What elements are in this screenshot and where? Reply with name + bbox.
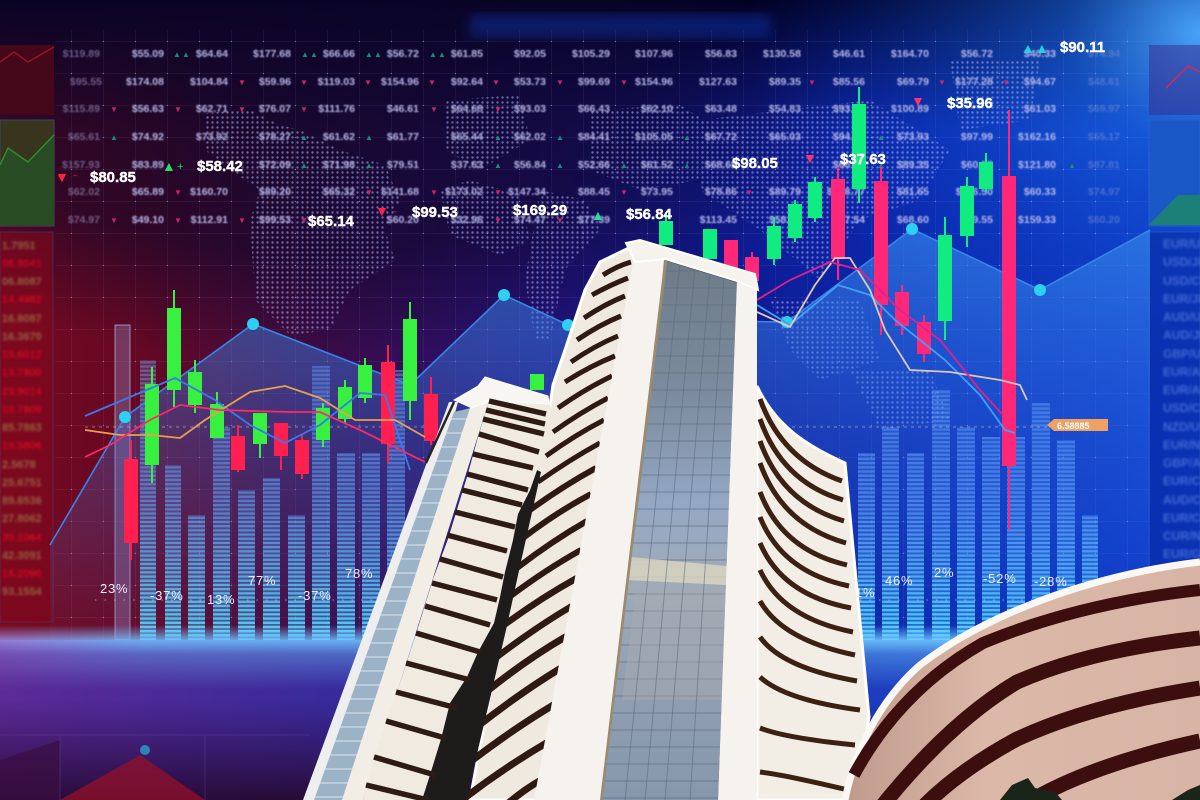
highlighted price arrows: ▲	[162, 158, 176, 174]
price ticker table: $111.76	[318, 103, 355, 115]
price ticker table: $154.96	[381, 76, 419, 88]
price ticker table: $61.62	[323, 131, 355, 143]
price ticker table: $174.08	[126, 76, 164, 88]
price ticker table: $116.50	[956, 186, 993, 198]
price ticker table: $65.61	[68, 131, 100, 143]
percentage labels: 2%	[934, 565, 954, 580]
price ticker table: $60.20	[1088, 214, 1120, 226]
price ticker table: $105.05	[635, 131, 673, 143]
panel: rate list: 23.9014	[2, 386, 43, 398]
price ticker table: $66.81	[833, 159, 865, 171]
panel: red mini chart	[0, 45, 54, 115]
panel: rate list: 89.6536	[2, 495, 42, 507]
highlighted prices	[90, 39, 1105, 230]
highlighted price arrows: ▼	[803, 150, 817, 166]
moving average lines	[85, 258, 1027, 470]
panel: rate list: 27.8062	[2, 513, 42, 525]
building: curved dome building	[845, 560, 1200, 800]
highlighted price arrows	[55, 40, 1049, 223]
price ticker table: $66.66	[323, 48, 355, 60]
dome balcony bands	[854, 590, 1200, 800]
price ticker table: $58.85	[769, 214, 801, 226]
panel: rate list: 06.8087	[2, 276, 42, 288]
panel: rate list: 13.7800	[2, 367, 42, 379]
highlighted prices: $90.11	[1060, 39, 1105, 56]
highlighted price arrows: –	[392, 207, 397, 216]
price ticker table: $65.44	[451, 131, 483, 143]
price ticker table: $89.20	[259, 186, 291, 198]
price ticker table: $74.97	[68, 214, 100, 226]
highlighted prices: $35.96	[947, 95, 993, 112]
price ticker table: $173.02	[445, 186, 483, 198]
price tag label: 6.58885	[1057, 421, 1090, 431]
percentage labels: -52%	[983, 571, 1017, 586]
price ticker table: $52.66	[578, 159, 610, 171]
ticker arrows: ▲▲▲▲▲▲▲	[110, 133, 885, 142]
price ticker table	[62, 48, 1120, 226]
highlighted prices: $169.29	[513, 202, 567, 219]
price ticker table: $89.79	[769, 186, 801, 198]
price ticker table: $46.61	[387, 103, 419, 115]
price ticker table: $77.39	[578, 214, 610, 226]
price ticker table: $105.29	[572, 48, 610, 60]
price ticker table: $87.81	[1088, 159, 1120, 171]
dotted world map	[205, 60, 1040, 430]
price ticker table: $64.64	[196, 48, 228, 60]
panel: rate list: 14.4982	[2, 294, 42, 306]
price ticker table: $62.02	[514, 131, 546, 143]
price ticker table: $162.16	[1018, 131, 1056, 143]
bottom chart fragments	[0, 735, 310, 800]
price ticker table: $93.03	[514, 103, 546, 115]
highlighted prices: $37.63	[840, 151, 886, 168]
price ticker table: $48.61	[1088, 76, 1120, 88]
panel: rate list: 16.8087	[2, 313, 42, 325]
price ticker table: $157.93	[62, 159, 100, 171]
price ticker table: $127.63	[699, 76, 737, 88]
highlighted prices: $99.53	[412, 204, 458, 221]
highlighted prices: $65.14	[308, 213, 355, 230]
price ticker table: $62.10	[641, 103, 673, 115]
panel: rate list: 19.5806	[2, 440, 42, 452]
lower glowing floor	[0, 626, 970, 800]
percentage labels: 77%	[248, 573, 276, 588]
price ticker table: $59.96	[259, 76, 291, 88]
panel: rate list: 93.1554	[2, 586, 43, 598]
price ticker table: $147.34	[508, 186, 546, 198]
ticker arrows: ▼▼▼▼▼▼	[110, 105, 502, 114]
left side panels	[0, 45, 54, 622]
price ticker table: $37.63	[451, 159, 483, 171]
panel: rate list: 2.5678	[2, 459, 36, 471]
price ticker table: $65.03	[769, 131, 801, 143]
chart markers	[119, 223, 1046, 423]
price ticker table: $177.28	[955, 76, 993, 88]
price ticker table: $115.89	[63, 103, 100, 115]
price ticker table: $61.85	[451, 48, 483, 60]
price ticker table: $104.84	[190, 76, 228, 88]
price ticker table: $83.89	[132, 159, 164, 171]
price ticker table: $81.65	[897, 186, 929, 198]
price ticker table: $56.72	[387, 48, 419, 60]
price ticker table: $56.84	[514, 159, 546, 171]
panel: rate list: 10.7809	[2, 404, 42, 416]
ticker arrows: ▲▲▲▲▲▲▲▲	[300, 161, 1076, 170]
price ticker table: $68.66	[705, 159, 737, 171]
price ticker table: $65.89	[132, 186, 164, 198]
highlighted price arrows: ▲	[591, 207, 605, 223]
price ticker table: $74.97	[1088, 186, 1120, 198]
price ticker table: $130.58	[763, 48, 801, 60]
price ticker table: $56.63	[132, 103, 164, 115]
highlighted price arrows: ▲	[1035, 40, 1049, 56]
panel: rate list	[0, 232, 53, 622]
price ticker table: $92.05	[514, 48, 546, 60]
price ticker table: $66.43	[578, 103, 610, 115]
price ticker table: $78.86	[705, 186, 737, 198]
panel: rate list: 16.3670	[2, 331, 42, 343]
price ticker table: $53.73	[514, 76, 546, 88]
panel: rate list: 08.8041	[2, 258, 42, 270]
price ticker table: $68.60	[897, 214, 929, 226]
price ticker table: $74.47	[514, 214, 546, 226]
percentage labels: 1%	[855, 585, 875, 600]
price ticker table: $60.55	[961, 159, 993, 171]
ticker arrows: ▼▼▼▼▼▼▼▼▼▼	[238, 78, 1010, 87]
price ticker table: $119.03	[318, 76, 355, 88]
price ticker table: $67.72	[705, 131, 737, 143]
price ticker table: $76.07	[259, 103, 291, 115]
right side panels	[1149, 45, 1200, 592]
price ticker table: $99.53	[259, 214, 291, 226]
percentage labels: 78%	[345, 566, 373, 581]
ticker arrows	[110, 50, 1076, 225]
price ticker table: $69.79	[897, 76, 929, 88]
highlighted prices: $56.84	[626, 206, 673, 223]
price ticker table: $108.77	[827, 186, 865, 198]
panel: currency pair list	[1149, 232, 1200, 592]
price ticker table: $46.61	[833, 48, 865, 60]
price ticker table: $94.67	[1024, 76, 1056, 88]
percentage labels	[100, 565, 1068, 607]
panel: red mini chart right	[1149, 45, 1200, 115]
highlighted prices: $98.05	[732, 155, 778, 172]
price ticker table: $49.10	[132, 214, 164, 226]
price ticker table: $32.96	[451, 214, 483, 226]
price ticker table: $87.54	[833, 214, 865, 226]
price ticker table: $113.45	[700, 214, 737, 226]
highlighted price arrows: ▼	[55, 169, 69, 185]
price ticker table: $54.83	[769, 103, 801, 115]
highlighted price arrows: ▲	[1021, 40, 1035, 56]
highlighted prices: $80.85	[90, 169, 136, 186]
highlighted outlined bar	[115, 325, 130, 640]
price ticker table: $107.96	[635, 48, 673, 60]
price ticker table: $119.89	[63, 48, 100, 60]
price ticker table: $60.20	[387, 214, 419, 226]
palm fronds	[1000, 778, 1200, 800]
price ticker table: $99.69	[578, 76, 610, 88]
price ticker table: $56.72	[961, 48, 993, 60]
price ticker table: $74.92	[132, 131, 164, 143]
highlighted price arrows: –	[73, 171, 78, 180]
area line chart	[50, 223, 1150, 640]
percentage labels: -37%	[150, 588, 184, 603]
highlighted prices: $58.42	[197, 158, 243, 175]
price ticker table: $56.83	[705, 48, 737, 60]
white columns	[534, 240, 758, 800]
price ticker table: $92.64	[451, 76, 483, 88]
price ticker table: $89.35	[897, 159, 929, 171]
panel: teal mini chart right	[1149, 120, 1200, 226]
panel: rate list: 42.3091	[2, 550, 42, 562]
panel: rate list: 1.7951	[2, 240, 36, 252]
price ticker table: $160.70	[190, 186, 228, 198]
price tag label	[1047, 419, 1108, 431]
price ticker table: $141.68	[381, 186, 419, 198]
price ticker table: $62.71	[196, 103, 228, 115]
price ticker table: $73.95	[641, 186, 673, 198]
price ticker table: $97.99	[961, 131, 993, 143]
side glass strip	[303, 402, 471, 800]
price ticker table: $79.51	[387, 159, 419, 171]
price ticker table: $93.46	[833, 103, 865, 115]
price ticker table: $89.55	[961, 214, 993, 226]
panel: rate list: 39.1064	[2, 532, 43, 544]
center balcony wing	[462, 246, 660, 800]
price ticker table: $95.55	[70, 76, 102, 88]
price ticker table: $78.27	[259, 131, 291, 143]
price ticker table: $62.02	[68, 186, 100, 198]
price ticker table: $88.45	[578, 186, 610, 198]
price ticker table: $100.89	[891, 103, 929, 115]
price ticker table: $89.35	[769, 76, 801, 88]
percentage labels: 13%	[207, 592, 235, 607]
price ticker table: $121.80	[1018, 159, 1056, 171]
front wing balconies	[342, 377, 553, 800]
price ticker table: $55.17	[1088, 131, 1120, 143]
price ticker table: $84.41	[578, 131, 610, 143]
highlighted price arrows: ▼	[911, 93, 925, 109]
price ticker table: $69.97	[1088, 103, 1120, 115]
right curved wing	[757, 386, 869, 800]
price ticker table: $94.68	[833, 131, 865, 143]
price ticker table: $64.68	[451, 103, 483, 115]
highlighted price arrows: ▼	[375, 203, 389, 219]
price ticker table: $61.03	[1024, 103, 1056, 115]
price ticker table: $73.93	[897, 131, 929, 143]
percentage labels: 46%	[885, 573, 913, 588]
price ticker table: $65.32	[323, 186, 355, 198]
ticker arrows: ▼▼▼▼▼▼	[174, 188, 753, 197]
price ticker table: $112.91	[191, 214, 228, 226]
price ticker table: $61.77	[387, 131, 419, 143]
price ticker table: $72.09	[259, 159, 291, 171]
price ticker table: $164.70	[891, 48, 929, 60]
wing shadow	[422, 470, 541, 800]
price ticker table: $177.68	[253, 48, 291, 60]
candlesticks left	[125, 290, 543, 560]
price ticker table: $60.33	[1024, 186, 1056, 198]
price ticker table: $40.33	[1024, 48, 1056, 60]
price ticker table: $61.52	[641, 159, 673, 171]
panel: rate list: 25.6751	[2, 477, 42, 489]
panel: rate list: 85.7863	[2, 422, 42, 434]
dashed price level line	[85, 426, 1050, 428]
price ticker table: $85.56	[833, 76, 865, 88]
price ticker table: $71.98	[323, 159, 355, 171]
price ticker table: $154.96	[635, 76, 673, 88]
price ticker table: $63.48	[705, 103, 737, 115]
panel: green mini chart	[0, 120, 54, 226]
ticker arrows: ▲▲▲▲▲▲▲▲	[173, 50, 446, 59]
candlesticks right	[660, 87, 1015, 530]
percentage labels: -37%	[298, 588, 332, 603]
price ticker table: $159.33	[1018, 214, 1056, 226]
highlighted price arrows: +	[177, 161, 183, 173]
building: stock exchange tower	[303, 240, 869, 800]
price ticker table: $73.92	[196, 131, 228, 143]
percentage labels: -28%	[1034, 574, 1068, 589]
striped volume bars	[140, 360, 1098, 640]
glass curtain wall	[600, 259, 737, 800]
panel: rate list: 18.2090	[2, 568, 42, 580]
panel: rate list: 15.6012	[2, 349, 42, 361]
price ticker table: $74.94	[1088, 48, 1120, 60]
price ticker table: $55.09	[132, 48, 164, 60]
ticker arrows: ▼▼▼▼▼▼	[110, 216, 564, 225]
percentage labels: 23%	[100, 581, 128, 596]
